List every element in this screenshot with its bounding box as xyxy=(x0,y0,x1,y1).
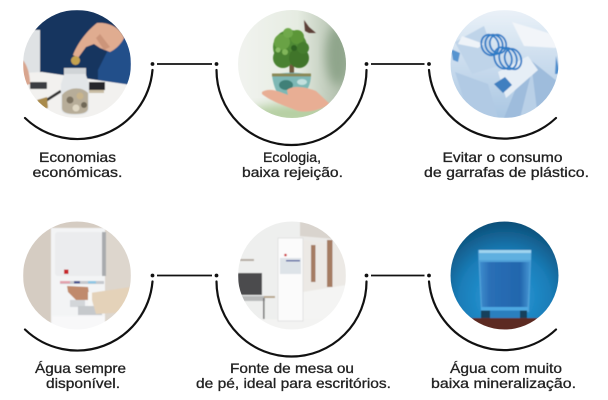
arc and connector: item 2 xyxy=(216,62,431,145)
label: Economias económicas: Economias xyxy=(39,149,116,165)
label: Fonte de mesa ou de pé, ideal para escritórios: Fonte de mesa ou xyxy=(230,360,354,376)
label: Água com muito baixa mineralização: baixa mineralização. xyxy=(431,375,576,391)
label: Evitar o consumo de garrafas de plástico: Evitar o consumo xyxy=(442,149,563,165)
image: coins in a jar xyxy=(23,10,131,118)
arc: item 6 xyxy=(429,282,556,350)
label: Ecologia, baixa rejeição: baixa rejeição. xyxy=(242,164,343,180)
label: Água com muito baixa mineralização: Água com muito xyxy=(450,360,562,376)
label: Água sempre disponível: Água sempre xyxy=(35,360,126,376)
image: floor dispenser in an office xyxy=(238,221,346,330)
label: Água sempre disponível: disponível. xyxy=(46,375,120,391)
arc and connector: item 5 xyxy=(216,274,431,356)
label: Água com muito baixa mineralização xyxy=(431,360,576,391)
label: Evitar o consumo de garrafas de plástico: de garrafas de plástico. xyxy=(424,164,589,180)
label: Evitar o consumo de garrafas de plástico xyxy=(424,149,589,180)
image: tree and globe in hand xyxy=(238,10,350,124)
label: Fonte de mesa ou de pé, ideal para escritórios: de pé, ideal para escritórios. xyxy=(196,375,391,391)
image: countertop water dispenser xyxy=(23,221,131,330)
image: plastic bottles xyxy=(450,10,560,118)
label: Economias económicas: económicas. xyxy=(32,164,122,180)
arc and connector: item 4 xyxy=(25,274,218,351)
arc: item 3 xyxy=(429,70,556,139)
label: Fonte de mesa ou de pé, ideal para escritórios xyxy=(196,360,391,391)
arc and connector: item 1 xyxy=(25,62,218,139)
label: Água sempre disponível xyxy=(35,360,126,391)
label: Economias económicas xyxy=(32,149,122,180)
label: Ecologia, baixa rejeição: Ecologia, xyxy=(263,149,321,165)
image: glass of water xyxy=(450,221,560,330)
label: Ecologia, baixa rejeição xyxy=(242,149,343,180)
